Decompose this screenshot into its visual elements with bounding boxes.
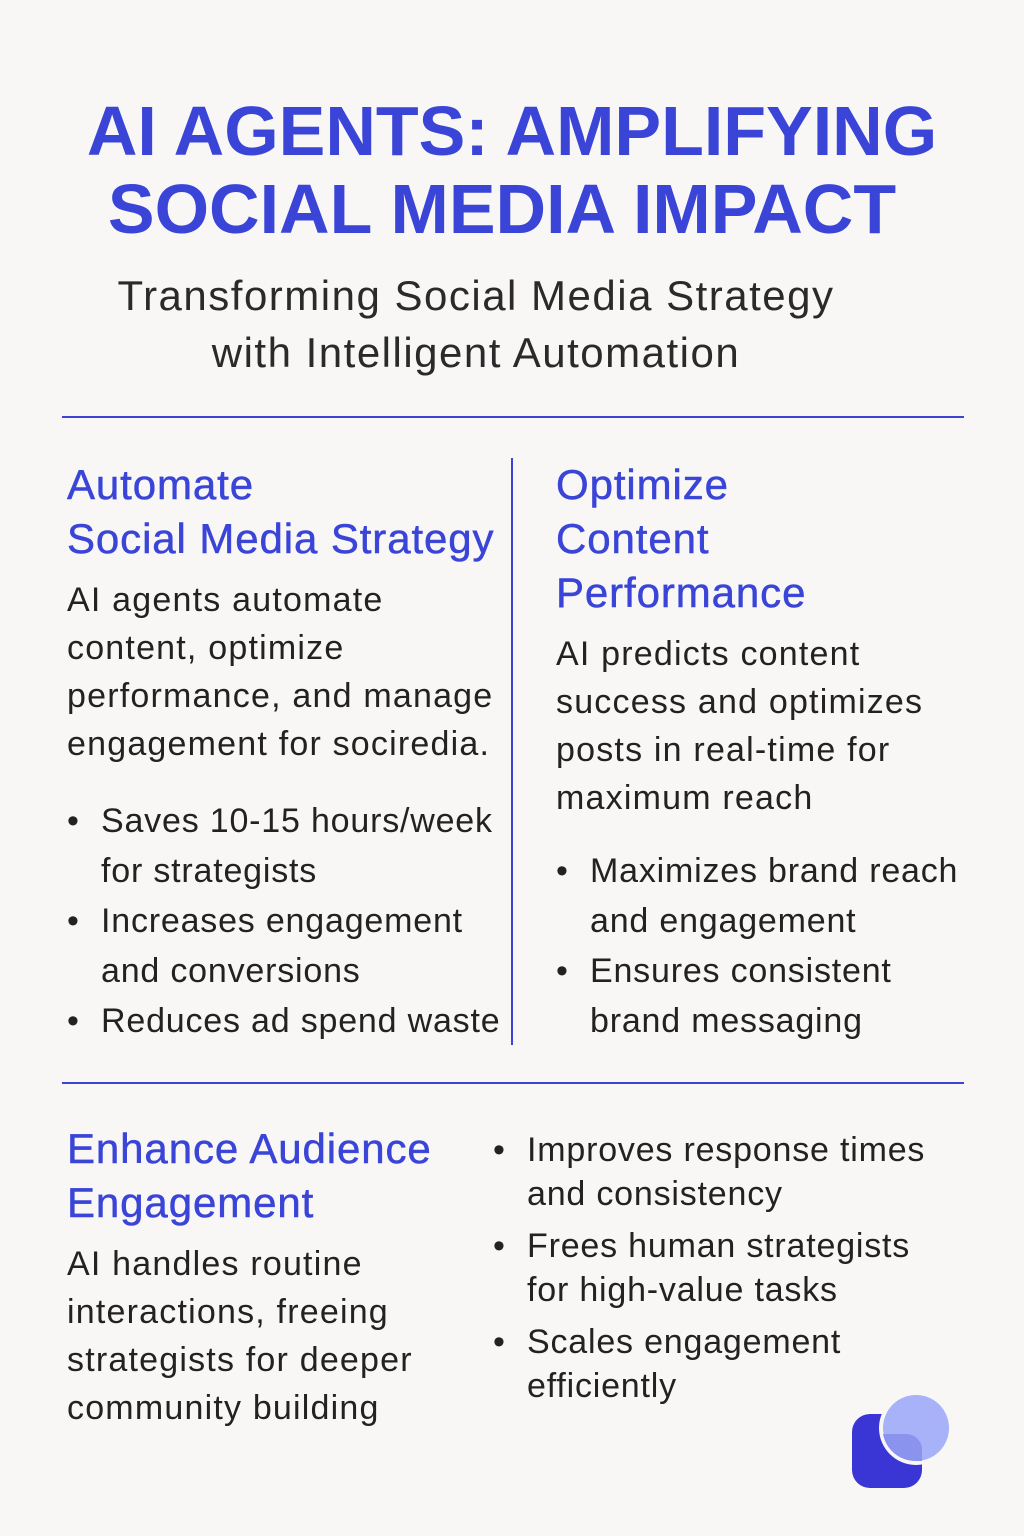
title: SOCIAL MEDIA IMPACT — [108, 170, 896, 248]
text: optimize body: success and optimizes — [556, 683, 923, 721]
heading: engagement — [67, 1125, 432, 1226]
text: optimize body: AI predicts content — [556, 635, 860, 673]
bullets: optimize: and engagement — [590, 902, 856, 940]
text: engagement body: strategists for deeper — [67, 1341, 413, 1379]
subtitle: Transforming Social Media Strategy — [117, 272, 835, 319]
bullets: optimize: Maximizes brand reach — [590, 852, 958, 890]
heading: automate: Automate — [67, 461, 254, 508]
heading: automate — [66, 461, 494, 562]
text: automate body: AI agents automate — [67, 581, 383, 619]
bullets: engagement: efficiently — [527, 1367, 677, 1405]
text: optimize body: maximum reach — [556, 779, 813, 817]
panel: automate — [66, 461, 500, 1040]
bullets: automate — [68, 802, 500, 1040]
text: engagement body: community building — [67, 1389, 380, 1427]
panel: optimize — [556, 461, 958, 1040]
text: optimize body — [556, 635, 923, 817]
text: automate body: engagement for sociredia. — [67, 725, 490, 763]
bullets: optimize: Ensures consistent — [590, 952, 892, 990]
bullets: automate: and conversions — [101, 952, 361, 990]
subtitle — [117, 272, 835, 376]
icon: logo — [852, 1395, 949, 1488]
heading: engagement: Enhance Audience — [67, 1125, 432, 1172]
heading: optimize: Optimize — [556, 461, 729, 508]
bullets: engagement — [494, 1131, 925, 1405]
heading: automate: Social Media Strategy — [67, 515, 494, 562]
bullets: engagement: and consistency — [527, 1175, 783, 1213]
heading: optimize: Performance — [556, 569, 806, 616]
bullets: automate: Saves 10-15 hours/week — [101, 802, 493, 840]
bullets: engagement: Scales engagement — [527, 1323, 841, 1361]
bullets: optimize: brand messaging — [590, 1002, 863, 1040]
heading: engagement: Engagement — [67, 1179, 314, 1226]
text: engagement body: AI handles routine — [67, 1245, 363, 1283]
bullets: engagement: Frees human strategists — [527, 1227, 910, 1265]
title — [87, 92, 937, 248]
text: automate body: content, optimize — [67, 629, 344, 667]
text: automate body: performance, and manage — [67, 677, 493, 715]
panel: engagement — [67, 1125, 432, 1427]
bullets: automate: for strategists — [101, 852, 317, 890]
text: automate body — [67, 581, 493, 763]
heading: optimize — [556, 461, 806, 616]
text: engagement body — [67, 1245, 413, 1427]
bullets: automate: Reduces ad spend waste — [101, 1002, 500, 1040]
heading: optimize: Content — [556, 515, 709, 562]
text: engagement body: interactions, freeing — [67, 1293, 389, 1331]
title: AI AGENTS: AMPLIFYING — [87, 92, 937, 170]
bullets: engagement: for high-value tasks — [527, 1271, 838, 1309]
bullets: automate: Increases engagement — [101, 902, 463, 940]
subtitle: with Intelligent Automation — [212, 329, 740, 376]
bullets: optimize — [557, 852, 958, 1040]
text: optimize body: posts in real-time for — [556, 731, 890, 769]
bullets: engagement: Improves response times — [527, 1131, 925, 1169]
